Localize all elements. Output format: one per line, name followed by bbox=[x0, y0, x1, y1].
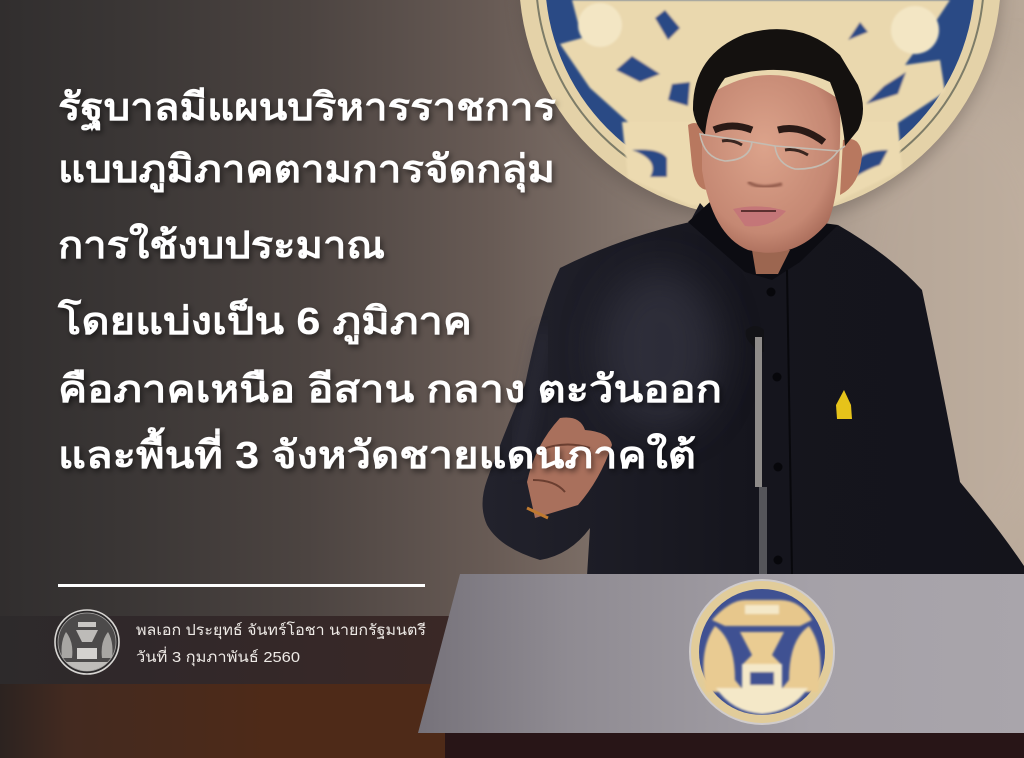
headline text: การใช้งบประมาณ bbox=[58, 223, 385, 267]
hand bbox=[527, 418, 612, 518]
small seal icon bbox=[55, 610, 119, 674]
headline text: รัฐบาลมีแผนบริหารราชการ bbox=[58, 87, 557, 132]
headline text: และพื้นที่ 3 จังหวัดชายแดนภาคใต้ bbox=[58, 427, 696, 477]
face bbox=[702, 75, 840, 253]
headline text: โดยแบ่งเป็น 6 ภูมิภาค bbox=[57, 298, 472, 345]
podium bbox=[418, 574, 1024, 758]
speaker bbox=[482, 29, 1024, 576]
headline text bbox=[57, 87, 722, 477]
divider line bbox=[58, 584, 425, 587]
hair bbox=[693, 29, 863, 146]
podium seal bbox=[690, 580, 834, 724]
wall emblem: government seal bbox=[519, 0, 1001, 225]
neck bbox=[752, 250, 790, 274]
jacket bbox=[482, 203, 1024, 576]
headline text: คือภาคเหนือ อีสาน กลาง ตะวันออก bbox=[58, 369, 722, 411]
ears bbox=[688, 123, 708, 190]
glasses bbox=[700, 134, 845, 169]
eyes bbox=[722, 140, 808, 155]
attribution text bbox=[136, 621, 426, 667]
collar bbox=[688, 200, 838, 280]
eyebrows bbox=[714, 126, 824, 142]
pin bbox=[836, 390, 852, 419]
attribution text: วันที่ 3 กุมภาพันธ์ 2560 bbox=[136, 646, 300, 667]
microphone bbox=[746, 326, 767, 575]
nose and mouth bbox=[748, 182, 782, 187]
placket and buttons bbox=[787, 270, 792, 574]
jacket sheen bbox=[600, 270, 720, 430]
headline text: แบบภูมิภาคตามการจัดกลุ่ม bbox=[58, 149, 555, 193]
attribution text: พลเอก ประยุทธ์ จันทร์โอชา นายกรัฐมนตรี bbox=[136, 621, 426, 640]
